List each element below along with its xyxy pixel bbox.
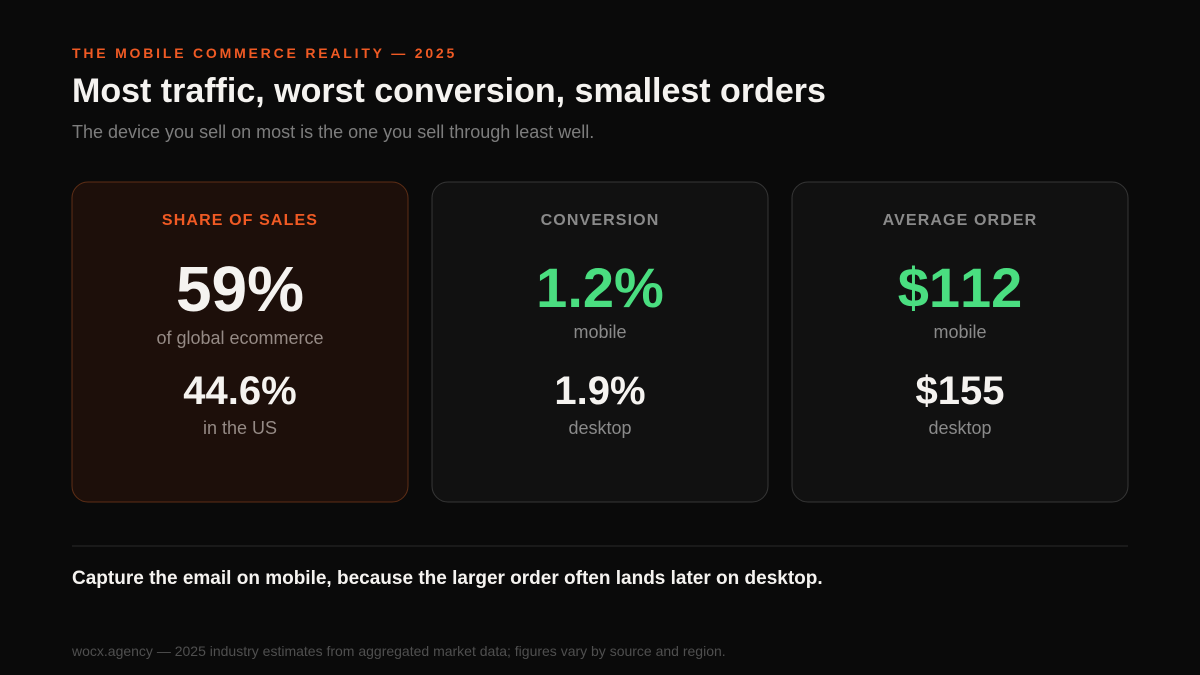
stat: 1.2% mobile: 1.2%	[536, 256, 664, 319]
panel: share of sales	[72, 182, 408, 502]
panel: average order	[792, 182, 1128, 502]
takeaway: Capture the email on mobile, because the larger order often lands later on desktop.	[72, 568, 823, 589]
panel: conversion	[432, 182, 768, 502]
stat: $112 mobile: $112	[898, 256, 1022, 319]
caption: desktop: desktop	[928, 418, 992, 438]
caption: mobile: mobile	[933, 322, 987, 342]
stat: 44.6% US: 44.6%	[183, 369, 297, 413]
caption: desktop: desktop	[568, 418, 632, 438]
panel label: conversion: CONVERSION	[541, 212, 659, 229]
caption: of global ecommerce: of global ecommerce	[156, 328, 324, 348]
eyebrow: THE MOBILE COMMERCE REALITY — 2025	[72, 45, 457, 61]
stat: 1.9% desktop: 1.9%	[554, 369, 646, 413]
stat: $155 desktop: $155	[916, 369, 1004, 413]
panel label: share of sales: SHARE OF SALES	[162, 212, 318, 229]
footer source note: wocx.agency — 2025 industry estimates from aggregated market data; figures vary by source and region.	[72, 643, 726, 659]
stat: 59% global: 59%	[176, 253, 304, 325]
panel label: average order: AVERAGE ORDER	[883, 212, 1037, 229]
title: Most traffic, worst conversion, smallest orders	[72, 72, 826, 110]
subtitle: The device you sell on most is the one you sell through least well.	[72, 122, 594, 142]
caption: in the US: in the US	[203, 418, 277, 438]
caption: mobile: mobile	[573, 322, 627, 342]
